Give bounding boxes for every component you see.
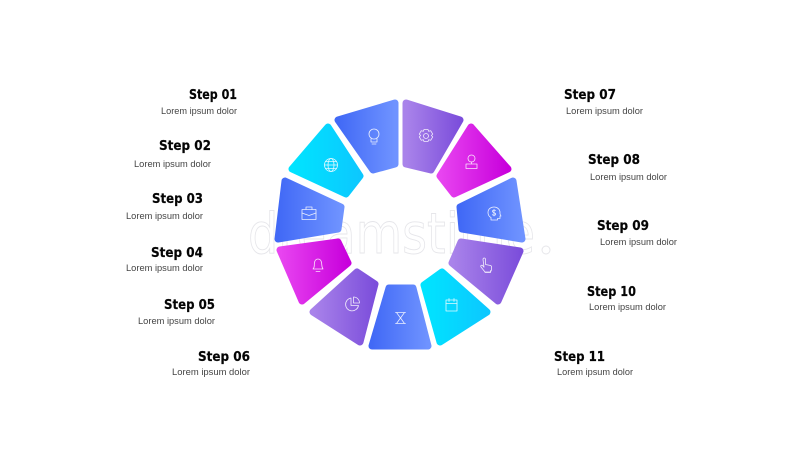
label: step 08: Step 08 (588, 152, 640, 168)
label: step 05: Step 05 (164, 297, 215, 313)
segment: step 03 briefcase (278, 181, 341, 239)
icon: calendar (446, 298, 457, 311)
segment: step 06 hourglass (372, 288, 428, 346)
segment: step 04 bell (280, 242, 348, 301)
label: step 11: Lorem ipsum dolor (557, 367, 633, 378)
label: step 05 (138, 297, 215, 327)
label: step 07: Lorem ipsum dolor (566, 106, 643, 117)
label: step 02: Lorem ipsum dolor (134, 159, 211, 170)
label: step 02 (134, 138, 211, 170)
label: step 06: Step 06 (198, 349, 250, 365)
watermark: dreamstime (248, 202, 535, 267)
segment: step 01 lightbulb (338, 103, 395, 170)
segment: step 05 pie chart (313, 272, 375, 342)
label: step 06 (172, 349, 250, 378)
icon: bell (313, 259, 323, 272)
label: step 07: Step 07 (564, 87, 616, 103)
label: step 10 (587, 284, 666, 313)
label: step 01: Step 01 (189, 87, 237, 103)
segment: step 10 person (440, 127, 508, 194)
segment: step 02 globe (292, 127, 360, 194)
icon: lightbulb (369, 129, 379, 144)
segment: step 11 gear (406, 103, 460, 170)
label: step 11: Step 11 (554, 349, 605, 365)
label: step 08 (588, 152, 667, 183)
icon: person (466, 155, 477, 168)
label: step 11 (554, 349, 633, 378)
label: step 09: Step 09 (597, 218, 649, 234)
label: step 03: Lorem ipsum dolor (126, 211, 203, 222)
icon: gear (419, 130, 433, 141)
label: step 03 (126, 191, 203, 222)
label: step 08: Lorem ipsum dolor (590, 172, 667, 183)
label: step 04: Step 04 (151, 245, 203, 261)
icon: briefcase (302, 207, 316, 220)
icon: hand pointer (481, 258, 492, 272)
label: step 01: Lorem ipsum dolor (161, 106, 237, 117)
segment: step 08 hand pointer (452, 242, 520, 301)
wheel diagram (278, 103, 522, 346)
segment: step 07 calendar (424, 272, 487, 342)
segment: step 09 head with dollar (460, 181, 522, 239)
label: step 07 (564, 87, 643, 117)
icon: pie chart (346, 297, 360, 311)
label: step 09 (597, 218, 677, 248)
label: step 09: Lorem ipsum dolor (600, 237, 677, 248)
icon: globe (324, 158, 338, 172)
label: step 01 (161, 87, 237, 117)
label: step 10: Lorem ipsum dolor (589, 302, 666, 313)
label: step 04 (126, 245, 203, 274)
label: step 06: Lorem ipsum dolor (172, 367, 250, 378)
icon: head with dollar sign (488, 207, 501, 220)
label: step 05: Lorem ipsum dolor (138, 316, 215, 327)
label: step 02: Step 02 (159, 138, 211, 154)
label: step 10: Step 10 (587, 284, 636, 300)
label: step 04: Lorem ipsum dolor (126, 263, 203, 274)
label: step 03: Step 03 (152, 191, 203, 207)
icon: hourglass (396, 312, 406, 324)
